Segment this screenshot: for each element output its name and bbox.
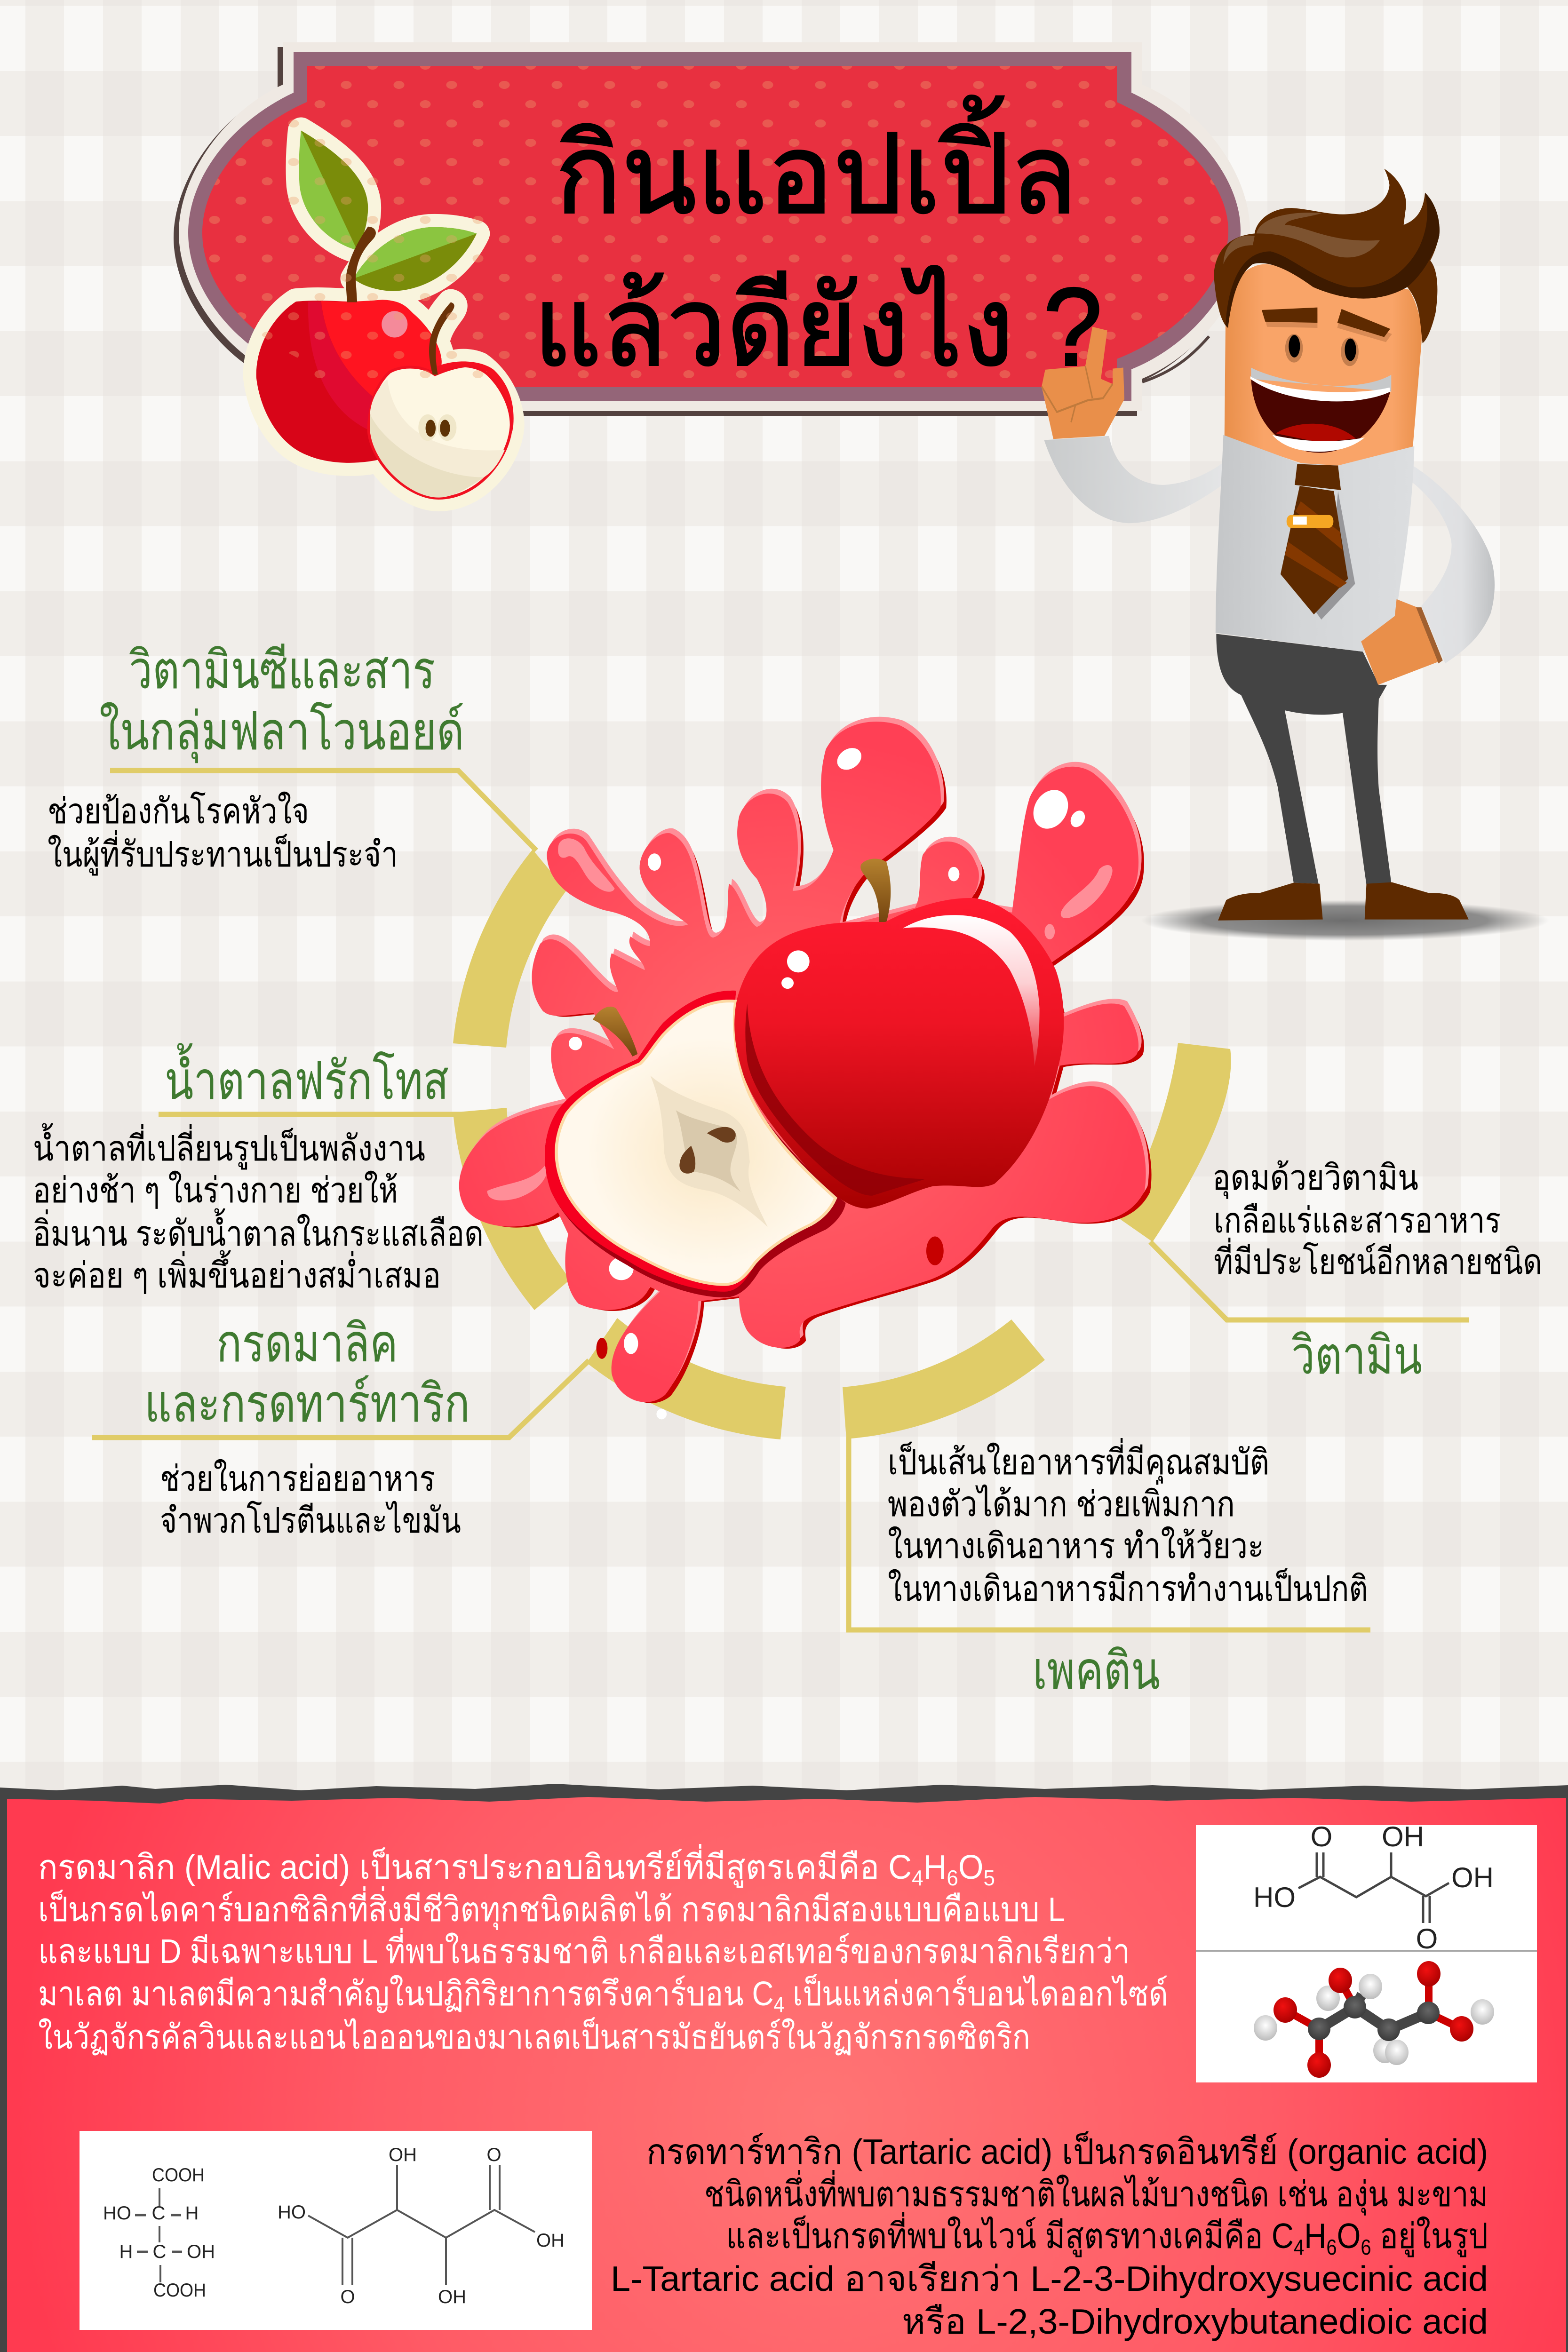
panel: acid information [0, 1784, 1568, 2352]
callout: fructose: จะค่อย ๆ เพิ่มขึ้นอย่างสม่ำเสมอ [33, 1250, 441, 1295]
text: malic acid: เป็นแหล่งคาร์บอนไดออกไซด์ [784, 1974, 1168, 2013]
text: tartaric acid: O [1337, 2216, 1361, 2256]
text: malic acid: เป็นกรดไดคาร์บอกซิลิกที่สิ่งมีชีวิตทุกชนิดผลิตได้ กรดมาลิกมีสองแบบคือแบบ L [38, 1886, 1065, 1930]
text: malic acid [38, 1844, 1168, 2056]
text: tartaric acid: และเป็นกรดที่พบในไวน์ มีสูตรทางเคมีคือ C [726, 2216, 1379, 2256]
text: tartaric acid: กรดทาร์ทาริก (Tartaric acid) เป็นกรดอินทรีย์ (organic acid) [646, 2131, 1488, 2171]
text: tartaric acid: อยู่ในรูป [1371, 2216, 1488, 2257]
skeletal formula: O [1311, 1821, 1332, 1852]
text: malic acid: มาเลต มาเลตมีความสำคัญในปฏิกิริยาการตรึงคาร์บอน C [38, 1975, 870, 2013]
skeletal formula: HO [278, 2202, 306, 2223]
shoes [1218, 882, 1469, 921]
callout: pectin: พองตัวได้มาก ช่วยเพิ่มกาก [888, 1480, 1235, 1524]
right arm sleeve [1411, 466, 1495, 663]
text: tartaric acid: H [1304, 2216, 1326, 2256]
title: แล้วดียังไง ? [533, 265, 1102, 389]
text: malic acid: และแบบ D มีเฉพาะแบบ L ที่พบในธรรมชาติ เกลือและเอสเทอร์ของกรดมาลิกเรียกว่า [38, 1928, 1130, 1971]
fischer projection: OH [187, 2241, 215, 2262]
hand on hip [1361, 599, 1443, 685]
text: tartaric acid [611, 2131, 1488, 2341]
fischer projection: HO [103, 2203, 131, 2224]
text: malic acid: 5 [983, 1866, 995, 1890]
text: malic acid: 4 [912, 1866, 923, 1890]
leaf one [299, 131, 368, 250]
fischer projection: H [119, 2241, 133, 2262]
callout: fructose: อิ่มนาน ระดับน้ำตาลในกระแสเลือด [33, 1208, 484, 1253]
leader lines [92, 771, 1469, 1630]
callout: malic and tartaric acid: จำพวกโปรตีนและไขมัน [160, 1501, 461, 1540]
callout: vitamins: เกลือแร่และสารอาหาร [1214, 1200, 1501, 1240]
title [533, 95, 1102, 389]
juice splash [459, 717, 1152, 1419]
callout: fructose: น้ำตาลที่เปลี่ยนรูปเป็นพลังงาน [33, 1123, 425, 1170]
skeletal formula: OH [1382, 1821, 1424, 1852]
skeletal formula [278, 2145, 565, 2307]
skeletal formula: OH [389, 2145, 417, 2165]
skeletal formula: O [340, 2287, 355, 2307]
text: malic acid: O [958, 1849, 983, 1886]
shirt [1216, 435, 1414, 652]
skeletal formula: O [1416, 1923, 1438, 1955]
fischer projection: H [185, 2203, 199, 2224]
callout: pectin: เป็นเส้นใยอาหารที่มีคุณสมบัติ [888, 1438, 1269, 1484]
callout: vitamins: อุดมด้วยวิตามิน [1212, 1158, 1418, 1199]
callout: vitamins [1212, 1158, 1542, 1385]
callout: pectin: เพคติน [1033, 1641, 1160, 1700]
icon: apple with leaves sticker [256, 131, 514, 498]
callout: malic and tartaric acid: และกรดทาร์ทาริก [144, 1374, 470, 1433]
text: malic acid: กรดมาลิก (Malic acid) เป็นสารประกอบอินทรีย์ที่มีสูตรเคมีคือ C [38, 1849, 951, 1886]
character: businessman pointing up [1042, 169, 1549, 941]
mouth [1250, 368, 1391, 453]
callout: pectin [888, 1438, 1368, 1700]
skeletal formula: OH [536, 2230, 565, 2251]
fischer projection: COOH [153, 2280, 206, 2301]
apple whole [734, 859, 1064, 1208]
text: tartaric acid: 6 [1361, 2235, 1371, 2259]
callout: fructose [33, 1043, 484, 1295]
hair [1214, 169, 1440, 343]
title: กินแอปเปิ้ล [555, 95, 1077, 236]
apple slice [369, 302, 514, 498]
fischer projection: C [153, 2241, 166, 2262]
fischer projection: C [152, 2203, 165, 2224]
text: malic acid: 6 [947, 1866, 958, 1890]
skeletal formula [1253, 1821, 1494, 1955]
callout: vitamin C and flavonoids: ในกลุ่มฟลาโวนอยด์ [99, 702, 464, 763]
fischer projection [103, 2165, 215, 2301]
polka dots overlay [202, 66, 1228, 387]
callout: malic and tartaric acid: ช่วยในการย่อยอาหาร [160, 1459, 435, 1498]
callout: fructose: อย่างช้า ๆ ในร่างกาย ช่วยให้ [33, 1170, 398, 1210]
skeletal formula: O [486, 2145, 501, 2165]
callout: vitamins: วิตามิน [1291, 1326, 1422, 1385]
apple half [545, 991, 846, 1297]
text: tartaric acid: 4 [1294, 2235, 1304, 2259]
legs and trousers [1216, 634, 1391, 885]
callout: malic and tartaric acid [144, 1314, 470, 1540]
ball and stick model [1254, 1961, 1494, 2078]
apple body [256, 227, 442, 463]
fischer projection: COOH [152, 2165, 205, 2185]
ring segments around apple [453, 850, 1231, 1439]
eyes [1285, 334, 1359, 366]
skeletal formula: OH [1451, 1862, 1494, 1893]
title sign [174, 42, 1250, 416]
callout: malic and tartaric acid: กรดมาลิค [216, 1314, 398, 1373]
text: tartaric acid: L-Tartaric acid อาจเรียกว่า L-2-3-Dihydroxysuecinic acid [611, 2259, 1488, 2298]
callout: fructose: น้ำตาลฟรักโทส [165, 1043, 449, 1110]
text: malic acid: H [923, 1849, 947, 1886]
chart: tartaric acid structure [80, 2131, 592, 2330]
text: malic acid: ในวัฏจักรคัลวินและแอนไอออนของมาเลตเป็นสารมัธยันตร์ในวัฏจักรกรดซิตริก [38, 2017, 1030, 2056]
tie [1281, 464, 1355, 620]
callout: vitamin C and flavonoids: วิตามินซีและสาร [129, 641, 435, 699]
callout: vitamin C and flavonoids: ในผู้ที่รับประทานเป็นประจำ [48, 830, 398, 876]
skeletal formula: HO [1253, 1882, 1296, 1913]
text: tartaric acid: 6 [1326, 2235, 1337, 2259]
callout: pectin: ในทางเดินอาหาร ทำให้วัยวะ [888, 1526, 1264, 1565]
splash and apples [459, 717, 1152, 1419]
callout: vitamin C and flavonoids [48, 641, 464, 876]
text: tartaric acid: หรือ L-2,3-Dihydroxybutanedioic acid [902, 2302, 1488, 2341]
callout: vitamin C and flavonoids: ช่วยป้องกันโรคหัวใจ [48, 791, 309, 831]
face [1225, 264, 1422, 471]
left arm sleeve [1044, 436, 1223, 523]
ground shadow [1141, 900, 1549, 941]
callout: pectin: ในทางเดินอาหารมีการทำงานเป็นปกติ [888, 1568, 1368, 1608]
skeletal formula: OH [438, 2287, 466, 2307]
pointing hand [1042, 327, 1124, 439]
leaf two [354, 227, 477, 291]
eyebrows [1262, 308, 1392, 342]
text: malic acid: 4 [773, 1992, 784, 2017]
chart: malic acid molecule [1196, 1821, 1537, 2082]
